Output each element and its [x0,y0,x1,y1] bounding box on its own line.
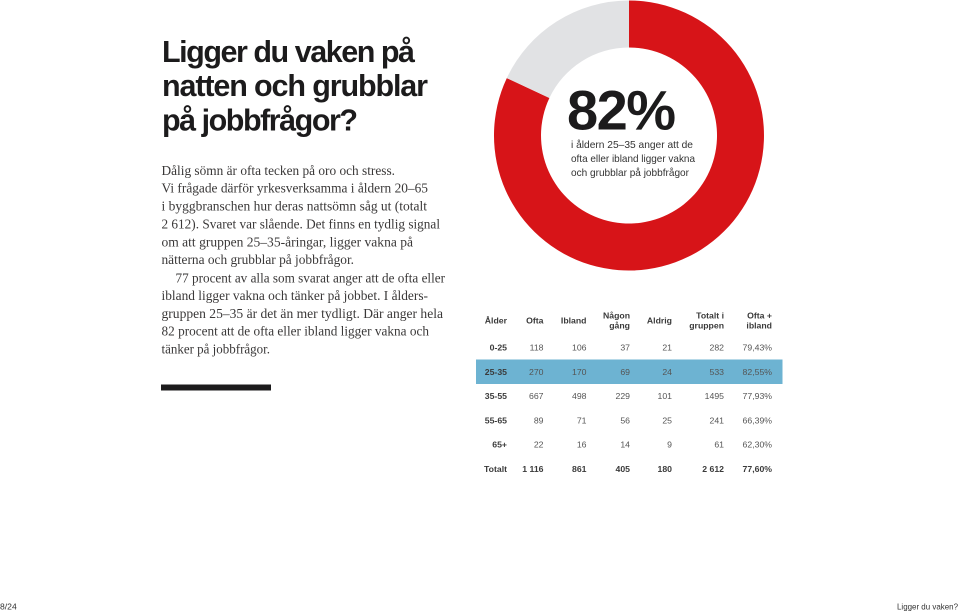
body text: 77 procent av alla som svarat anger att de ofta eller [176,271,445,286]
donut caption: och grubblar på jobbfrågor [571,167,690,179]
row 55-65 [485,416,772,426]
donut segment: remainder grey [507,0,629,98]
row 35-55: 498 [572,391,587,401]
row totalt: 861 [572,464,587,474]
body text: ibland ligger vakna och tänker på jobbet. I ålders- [162,289,428,304]
row 35-55: 77,93% [743,391,772,401]
row 55-65: 89 [534,416,544,426]
donut caption: i åldern 25–35 anger att de [571,139,693,151]
body text: Vi frågade därför yrkesverksamma i åldern 20–65 [162,182,428,197]
body text: nätterna och grubblar på jobbfrågor. [162,253,354,268]
table header: Ofta + [747,310,772,320]
donut chart: 82 percent [494,0,764,271]
row 55-65: 25 [662,416,672,426]
row totalt: 405 [616,464,630,474]
row 0-25: 0-25 [490,342,507,352]
table [476,310,782,474]
body text: om att gruppen 25–35-åringar, ligger vakna på [162,235,414,250]
row 65+: 65+ [492,440,507,450]
row 25-35 [485,367,772,377]
table header: gång [609,320,630,330]
row 25-35: 170 [572,367,587,377]
row 55-65: 66,39% [743,416,772,426]
row 0-25: 106 [572,342,587,352]
body text: Dålig sömn är ofta tecken på oro och stress. [162,164,395,179]
row 25-35: 270 [529,367,544,377]
black accent bar [161,384,271,390]
table header: Någon [603,310,630,320]
row 55-65: 55-65 [485,416,507,426]
table header [485,310,772,330]
row 65+: 16 [577,440,587,450]
row 65+: 62,30% [743,440,772,450]
row 55-65: 56 [620,416,630,426]
table header: Ibland [561,316,586,326]
title: på jobbfrågor? [162,104,358,138]
row totalt [484,464,772,474]
body text [162,164,445,357]
row 55-65: 71 [577,416,587,426]
table header: Totalt i [696,310,724,320]
row 0-25: 118 [530,342,544,352]
row 35-55: 667 [529,391,544,401]
body text: tänker på jobbfrågor. [162,342,270,357]
body text: 2 612). Svaret var slående. Det finns en tydlig signal [162,217,440,232]
row totalt: Totalt [484,464,507,474]
row 0-25: 79,43% [743,342,772,352]
row 0-25 [490,342,772,352]
row 0-25: 282 [710,342,724,352]
title: natten och grubblar [162,69,428,103]
row 0-25: 37 [620,342,630,352]
row 25-35: 69 [620,367,630,377]
row 55-65: 241 [710,416,724,426]
row 0-25: 21 [662,342,672,352]
donut segment: 82 percent red [494,0,764,271]
donut caption: ofta eller ibland ligger vakna [571,154,695,165]
row 65+: 14 [620,440,630,450]
row totalt: 77,60% [743,464,772,474]
body text: gruppen 25–35 är det än mer tydligt. Där anger hela [162,307,444,322]
row totalt: 2 612 [702,464,724,474]
row 35-55: 1495 [705,391,724,401]
table header: Aldrig [647,316,672,326]
title [162,35,428,138]
row 65+ [492,440,772,450]
table header: Ålder [485,316,508,326]
row 35-55 [485,391,772,401]
body text: i byggbranschen hur deras nattsömn såg ut (totalt [162,200,427,214]
row totalt: 180 [658,464,672,474]
big number 82%: 82% [567,78,676,142]
row 65+: 61 [714,440,724,450]
title: Ligger du vaken på [162,35,416,69]
highlighted row background [476,360,782,384]
table header: gruppen [689,320,724,330]
row 35-55: 229 [616,391,630,401]
row 25-35: 24 [662,367,672,377]
body text: 82 procent att de ofta eller ibland ligger vakna och [162,325,429,340]
table header: Ofta [526,316,544,326]
row 25-35: 25-35 [485,367,507,377]
row totalt: 1 116 [522,464,544,474]
row 25-35: 533 [710,367,724,377]
donut caption [571,139,695,179]
row 65+: 9 [667,440,672,450]
row 35-55: 101 [658,391,672,401]
row 35-55: 35-55 [485,391,507,401]
table header: ibland [746,320,772,330]
row 25-35: 82,55% [743,367,772,377]
row 65+: 22 [534,440,544,450]
